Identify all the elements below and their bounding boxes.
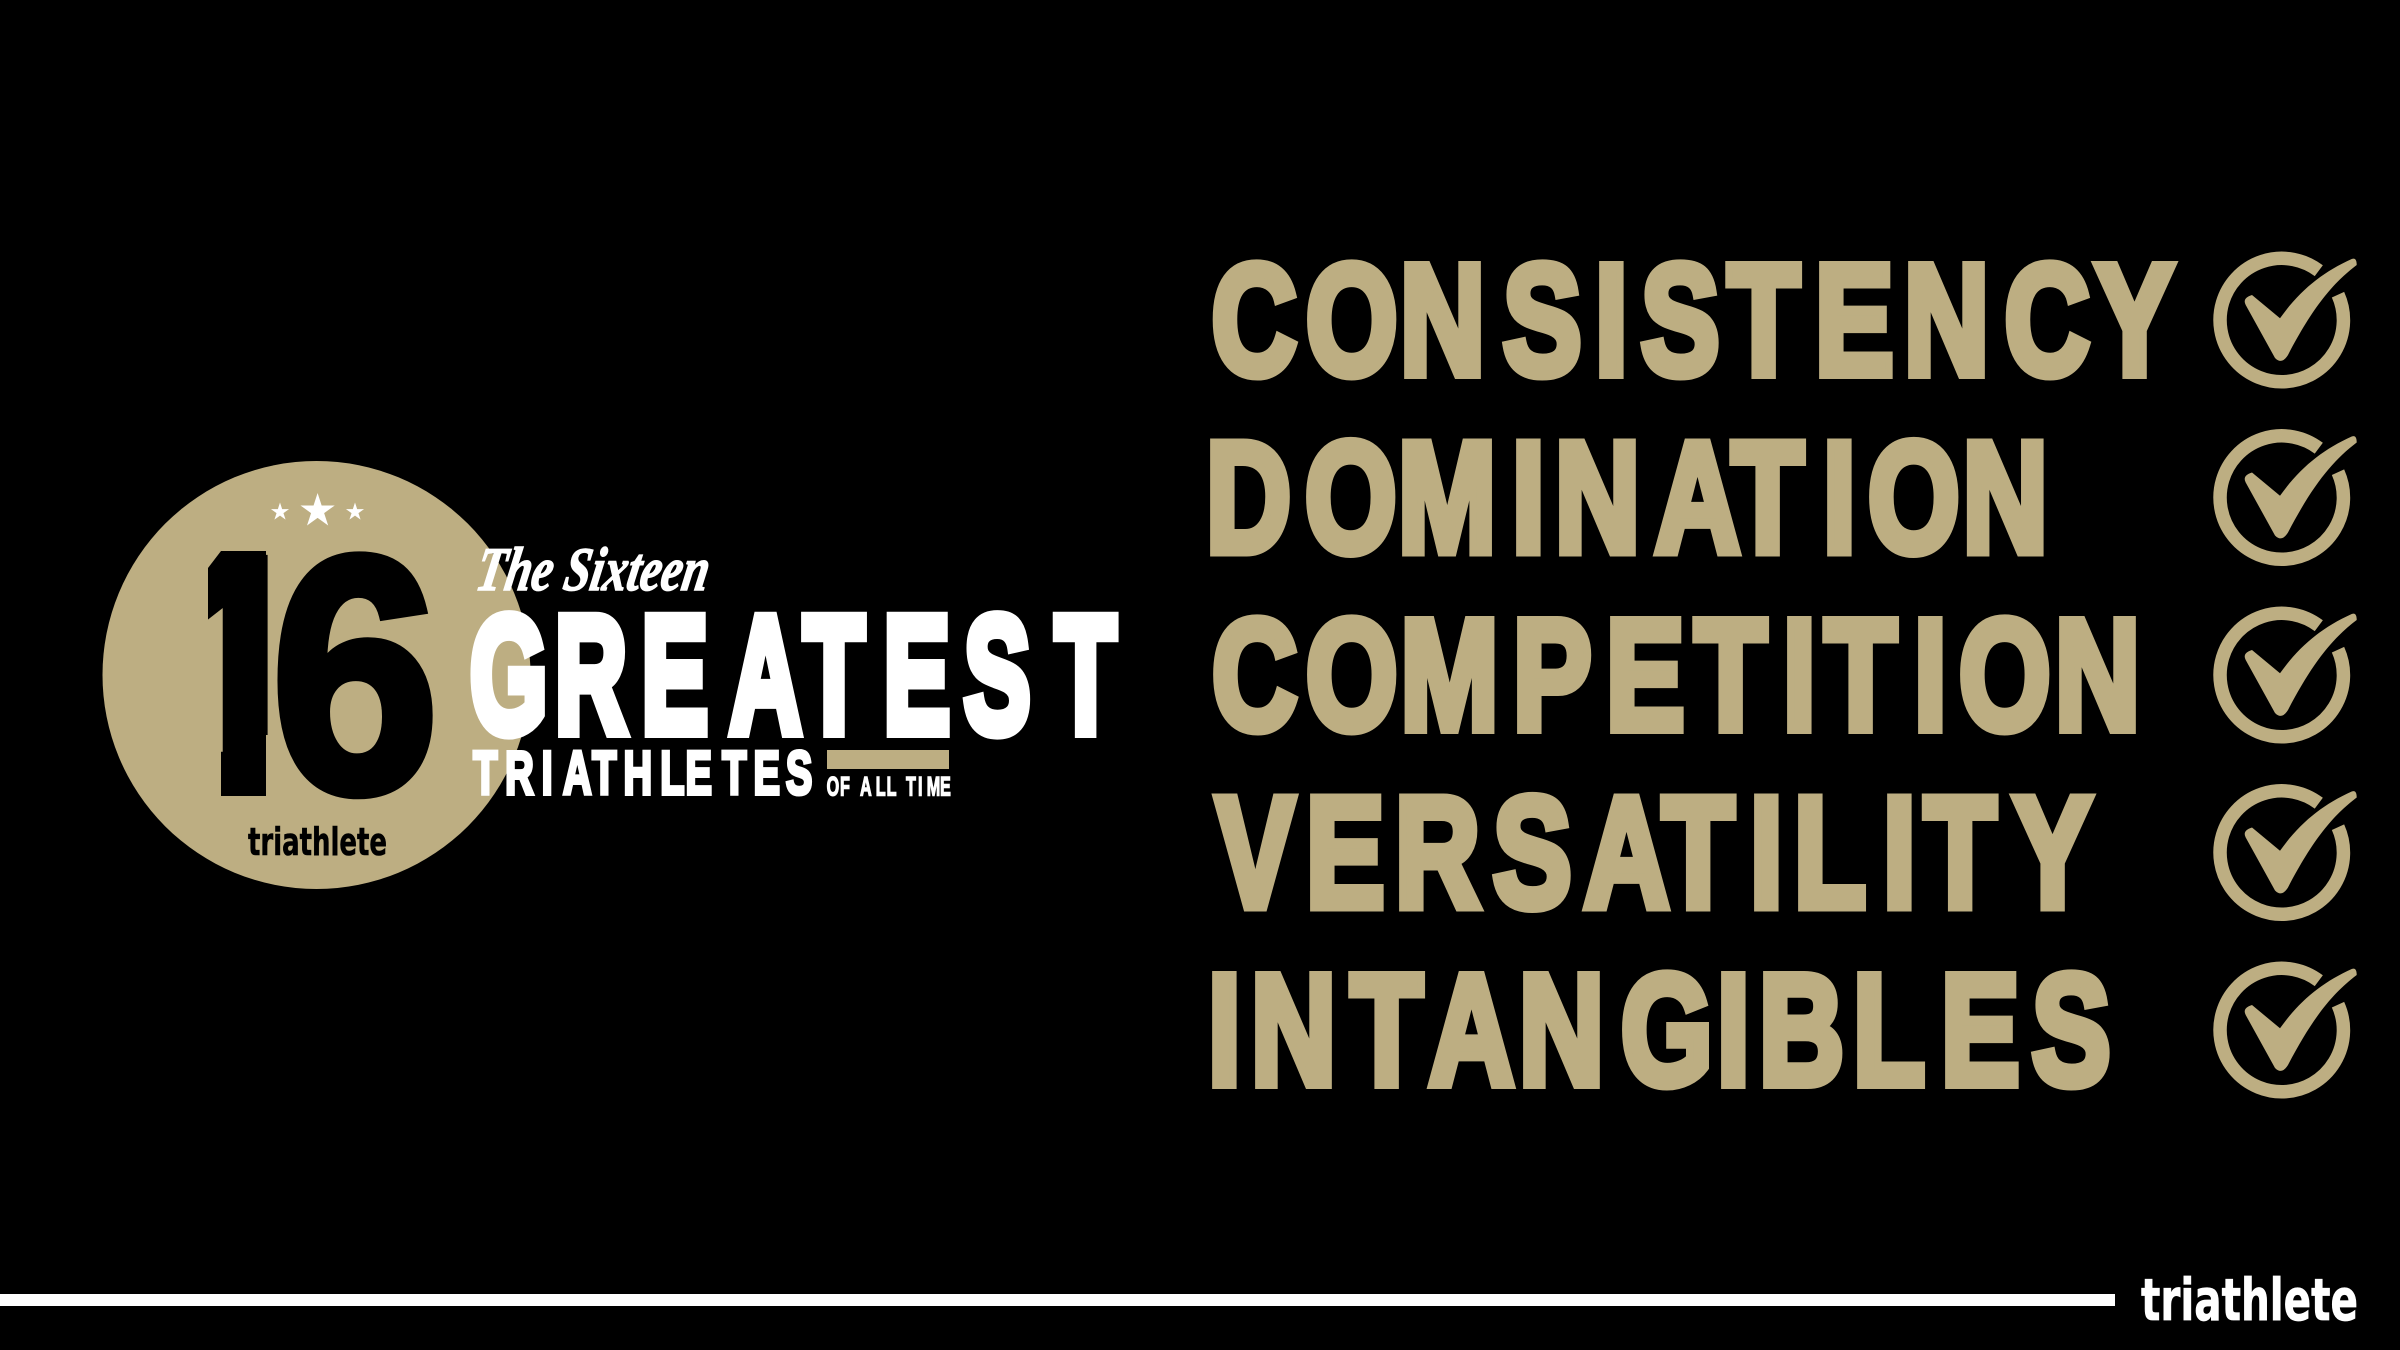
number 16: 1 xyxy=(164,488,313,863)
icon: check mark 4 xyxy=(2220,791,2357,914)
icon: check mark 5 xyxy=(2220,968,2357,1092)
subheading: OF ALL TIME: OF ALL TIME xyxy=(827,771,951,801)
subheading: TRIATHLETES: TRIATHLETES xyxy=(473,738,812,807)
criterion: competition: COMPETITION xyxy=(1212,588,2140,763)
script heading: The Sixteen: The Sixteen xyxy=(472,534,716,604)
criterion: versatility: VERSATILITY xyxy=(1216,765,2092,940)
number 16: 6 xyxy=(271,487,439,862)
badge wordmark: triathlete xyxy=(248,820,387,864)
footer rule xyxy=(0,1294,2115,1306)
criterion: consistency: CONSISTENCY xyxy=(1212,233,2174,408)
criterion: domination: DOMINATION xyxy=(1206,410,2048,585)
icon: check mark 2 xyxy=(2220,436,2357,559)
heading: GREATEST: GREATEST xyxy=(470,583,1116,768)
icon: check mark 1 xyxy=(2220,258,2357,382)
icon: three stars xyxy=(271,493,364,526)
accent bar xyxy=(827,750,949,769)
number 16 xyxy=(164,487,439,863)
badge: sixteen greatest triathletes logo xyxy=(102,461,1116,889)
icon: check mark 3 xyxy=(2220,613,2357,737)
criterion: intangibles: INTANGIBLES xyxy=(1208,943,2111,1118)
badge circle xyxy=(102,461,530,889)
